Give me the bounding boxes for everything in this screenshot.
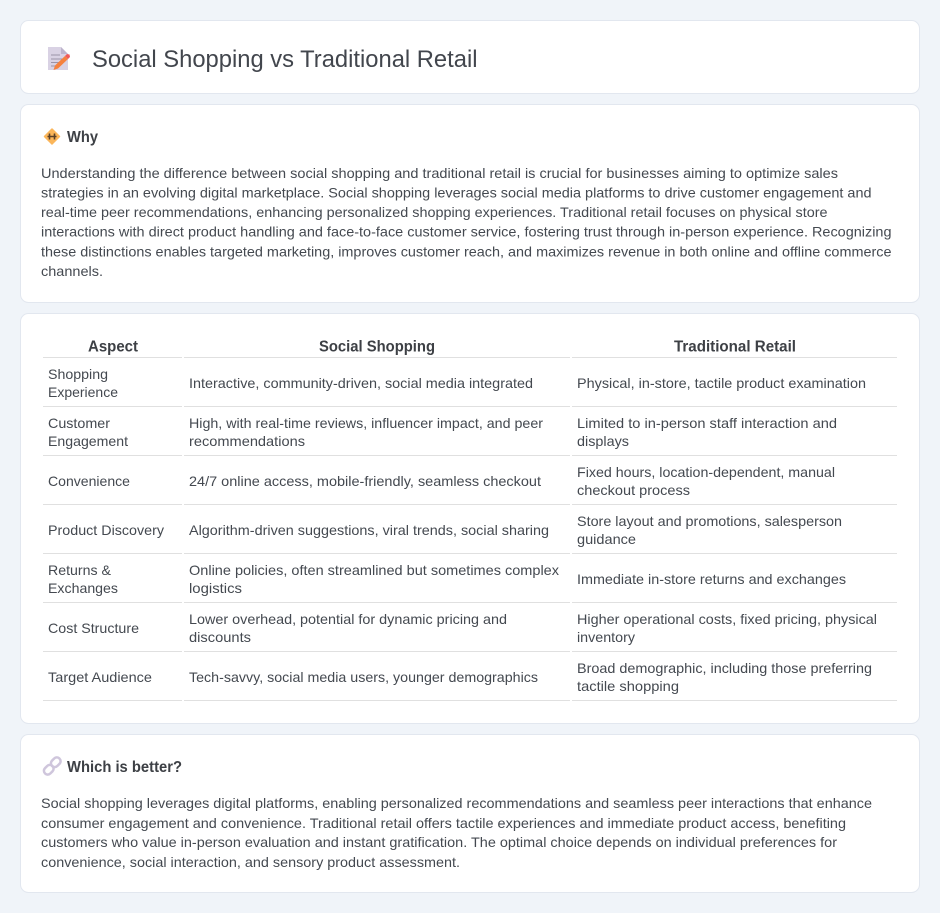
row: convenience: Fixed hours, location-dependent, manual — [577, 464, 835, 480]
icon: memo with pencil — [48, 47, 70, 70]
text block: why paragraph: Understanding the difference between social shopping and traditional retail is crucial for businesses aiming to optimize sales — [41, 165, 838, 181]
row: returns and exchanges: Online policies, often streamlined but sometimes complex — [189, 562, 559, 578]
row: shopping experience: Shopping — [48, 366, 108, 382]
row: target audience — [48, 660, 872, 694]
row: convenience — [48, 464, 835, 498]
row: returns and exchanges: Immediate in-store returns and exchanges — [577, 571, 846, 587]
table header: Aspect — [88, 338, 139, 356]
row: customer engagement: Limited to in-person staff interaction and — [577, 415, 837, 431]
row: convenience: Convenience — [48, 473, 130, 489]
icon: link — [42, 756, 62, 776]
text block: which is better paragraph: consumer engagement and convenience. Traditional retail offers tactile experiences and immediate product access, benefiting — [41, 815, 846, 831]
row: cost structure: discounts — [189, 629, 251, 645]
table header: Traditional Retail — [674, 338, 796, 356]
row: cost structure — [48, 611, 877, 645]
row: target audience: Tech-savvy, social media users, younger demographics — [189, 669, 538, 685]
row: customer engagement: High, with real-time reviews, influencer impact, and peer — [189, 415, 543, 431]
row: product discovery: guidance — [577, 531, 636, 547]
text block: why paragraph: channels. — [41, 263, 103, 279]
row: convenience: 24/7 online access, mobile-friendly, seamless checkout — [189, 473, 541, 489]
heading: which is better: Which is better? — [67, 759, 182, 776]
panel: comparison table — [20, 314, 920, 724]
row: shopping experience: Experience — [48, 384, 118, 400]
row: shopping experience: Physical, in-store, tactile product examination — [577, 375, 866, 391]
row: cost structure: inventory — [577, 629, 635, 645]
panel: title header — [20, 20, 920, 94]
row: customer engagement: recommendations — [189, 433, 305, 449]
table header: Social Shopping — [319, 338, 435, 356]
text block: why paragraph: real-time peer recommendations, enhancing personalized shopping experiences. Traditional retail focuses on physical store — [41, 204, 828, 220]
text block: which is better paragraph — [41, 795, 872, 870]
title: Social Shopping vs Traditional Retail — [92, 46, 478, 73]
heading: why: Why — [67, 129, 98, 146]
row: cost structure: Cost Structure — [48, 620, 139, 636]
row: target audience: Target Audience — [48, 669, 152, 685]
row: shopping experience — [48, 366, 866, 400]
text block: which is better paragraph: customers who value in-person evaluation and instant gratification. The optimal choice depends on individual preferences for — [41, 834, 837, 850]
row: returns and exchanges — [48, 562, 846, 596]
row: shopping experience: Interactive, community-driven, social media integrated — [189, 375, 533, 391]
table header — [88, 338, 796, 356]
text block: which is better paragraph: convenience, social interaction, and sensory product assessment. — [41, 854, 460, 870]
row: product discovery: Algorithm-driven suggestions, viral trends, social sharing — [189, 522, 549, 538]
icon: warning diamond — [44, 129, 60, 144]
panel: which is better — [20, 734, 920, 892]
row: product discovery: Store layout and promotions, salesperson — [577, 513, 842, 529]
row: convenience: checkout process — [577, 482, 690, 498]
row: returns and exchanges: Exchanges — [48, 580, 118, 596]
text block: why paragraph — [41, 165, 892, 279]
row: product discovery: Product Discovery — [48, 522, 164, 538]
text block: why paragraph: strategies in an evolving digital marketplace. Social shopping leverages social media platforms to drive customer engagement and — [41, 184, 872, 200]
row: returns and exchanges: logistics — [189, 580, 242, 596]
text block: why paragraph: these distinctions enables targeted marketing, improves customer reach, and maximizes revenue in both online and offline commerce — [41, 244, 892, 260]
text block: why paragraph: interactions with direct product handling and face-to-face customer service, fostering trust through in-person experience. Recognizing — [41, 224, 892, 240]
row: returns and exchanges: Returns & — [48, 562, 112, 578]
row: product discovery — [48, 513, 842, 547]
panel: why — [20, 104, 920, 302]
row: target audience: Broad demographic, including those preferring — [577, 660, 872, 676]
row: customer engagement: displays — [577, 433, 629, 449]
row: cost structure: Lower overhead, potential for dynamic pricing and — [189, 611, 507, 627]
row: target audience: tactile shopping — [577, 678, 679, 694]
row: customer engagement — [48, 415, 837, 449]
row: customer engagement: Engagement — [48, 433, 128, 449]
row: customer engagement: Customer — [48, 415, 110, 431]
text block: which is better paragraph: Social shopping leverages digital platforms, enabling personalized recommendations and seamless peer interactions that enhance — [41, 795, 872, 811]
row: cost structure: Higher operational costs, fixed pricing, physical — [577, 611, 877, 627]
